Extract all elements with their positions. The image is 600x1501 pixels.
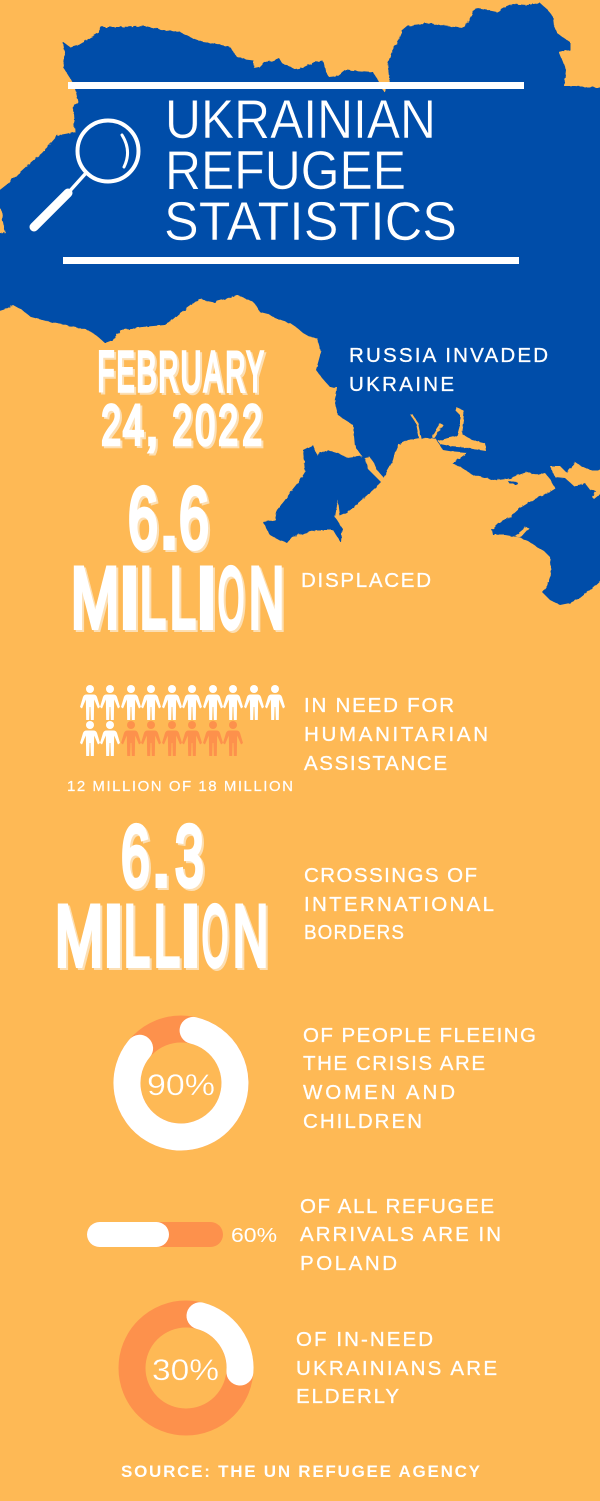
stat: 6.3 million: O <box>202 888 228 984</box>
stat: 6.6 million: N <box>249 550 284 646</box>
stat: 6.3 million: . <box>151 808 171 904</box>
donut chart: 90%: 90% <box>147 1069 215 1102</box>
stat: 6.6 million: 6 <box>179 470 209 566</box>
text: of people fleeing: CHILDREN <box>303 1110 422 1133</box>
date heading: , <box>145 394 159 458</box>
icon: magnifying glass <box>34 120 138 227</box>
text: in need for humanitarian assistance <box>304 694 488 775</box>
stat: 6.3 million: N <box>233 888 268 984</box>
stat: 6.3 million <box>55 808 268 984</box>
stat: 6.6 million: I <box>194 550 218 646</box>
text: Russia invaded Ukraine: UKRAINE <box>349 373 454 396</box>
stat: 6.3 million: I <box>178 888 202 984</box>
stat: 6.6 million: 6 <box>128 470 158 566</box>
text: crossings of international borders: CROSSINGS OF <box>304 864 477 887</box>
text: Y <box>246 340 264 404</box>
text: crossings of international borders: BORDERS <box>304 921 405 944</box>
date heading <box>98 340 264 458</box>
stat: 6.6 million: O <box>218 550 244 646</box>
date heading: 2 <box>172 394 192 458</box>
progress bar: 60% <box>87 1222 277 1247</box>
stat: 6.3 million: M <box>55 888 103 984</box>
text: crossings of international borders <box>304 864 494 944</box>
text: crossings of international borders: INTERNATIONAL <box>304 893 494 916</box>
text: of all refugee arrivals: ARRIVALS ARE IN <box>300 1223 501 1246</box>
source line: SOURCE: THE UN REFUGEE AGENCY <box>121 1462 481 1481</box>
text: of all refugee arrivals: POLAND <box>300 1252 397 1275</box>
stat: 6.3 million: 6 <box>121 808 150 904</box>
date heading: B <box>136 340 157 404</box>
date heading: R <box>225 340 246 404</box>
text: of all refugee arrivals <box>300 1195 501 1275</box>
date heading: A <box>204 340 222 404</box>
text: of all refugee arrivals: OF ALL REFUGEE <box>300 1195 494 1218</box>
stat: 6.6 million <box>71 470 284 646</box>
text: of in-need Ukrainians: ELDERLY <box>296 1385 399 1408</box>
text: Russia invaded Ukraine: RUSSIA INVADED <box>349 344 548 367</box>
text: in need for humanitarian assistance: HUMANITARIAN <box>304 723 488 746</box>
stat: 6.3 million: L <box>124 888 150 984</box>
stat: 6.6 million: I <box>118 550 141 646</box>
stat: 6.6 million: L <box>140 550 166 646</box>
date heading: 4 <box>123 394 144 458</box>
title: REFUGEE <box>165 139 406 201</box>
date heading: F <box>98 340 114 404</box>
stat: 6.3 million: L <box>154 888 180 984</box>
title <box>164 88 457 252</box>
donut chart: 90% <box>127 1029 235 1137</box>
date heading: E <box>116 340 134 404</box>
title rule bottom <box>63 257 519 264</box>
donut chart: 30% <box>132 1314 240 1422</box>
text: of in-need Ukrainians <box>296 1328 497 1408</box>
date heading: 2 <box>242 394 262 458</box>
text: of people fleeing <box>303 1024 536 1133</box>
date heading: 0 <box>195 394 215 458</box>
text: of people fleeing: THE CRISIS ARE <box>303 1052 485 1075</box>
title: UKRAINIAN <box>165 88 436 150</box>
date heading: 2 <box>101 394 121 458</box>
date heading: R <box>158 340 178 404</box>
text: in need for humanitarian assistance: IN NEED FOR <box>304 694 454 717</box>
date heading: 2 <box>218 394 238 458</box>
text: displaced: DISPLACED <box>301 569 431 592</box>
caption: 12 million of 18 million: 12 MILLION OF 18 MILLION <box>67 778 293 795</box>
stat: 6.3 million: 3 <box>175 808 204 904</box>
stat: 6.3 million: I <box>102 888 125 984</box>
map of Ukraine <box>0 3 600 605</box>
stat: 6.6 million: M <box>71 550 119 646</box>
text: of people fleeing: WOMEN AND <box>303 1081 455 1104</box>
title rule top <box>68 82 524 89</box>
text: of in-need Ukrainians: UKRAINIANS ARE <box>296 1357 497 1380</box>
stat: 6.6 million: . <box>159 470 179 566</box>
icon row: people 12 of 18 <box>80 685 285 756</box>
title: STATISTICS <box>164 190 457 252</box>
text: in need for humanitarian assistance: ASSISTANCE <box>304 752 447 775</box>
progress bar: 60%: 60% <box>231 1225 277 1247</box>
donut chart: 30%: 30% <box>152 1354 219 1387</box>
text: Russia invaded Ukraine <box>349 344 548 396</box>
text: of in-need Ukrainians: OF IN-NEED <box>296 1328 433 1351</box>
stat: 6.6 million: L <box>170 550 196 646</box>
text: of people fleeing: OF PEOPLE FLEEING <box>303 1024 536 1047</box>
date heading: U <box>180 340 201 404</box>
